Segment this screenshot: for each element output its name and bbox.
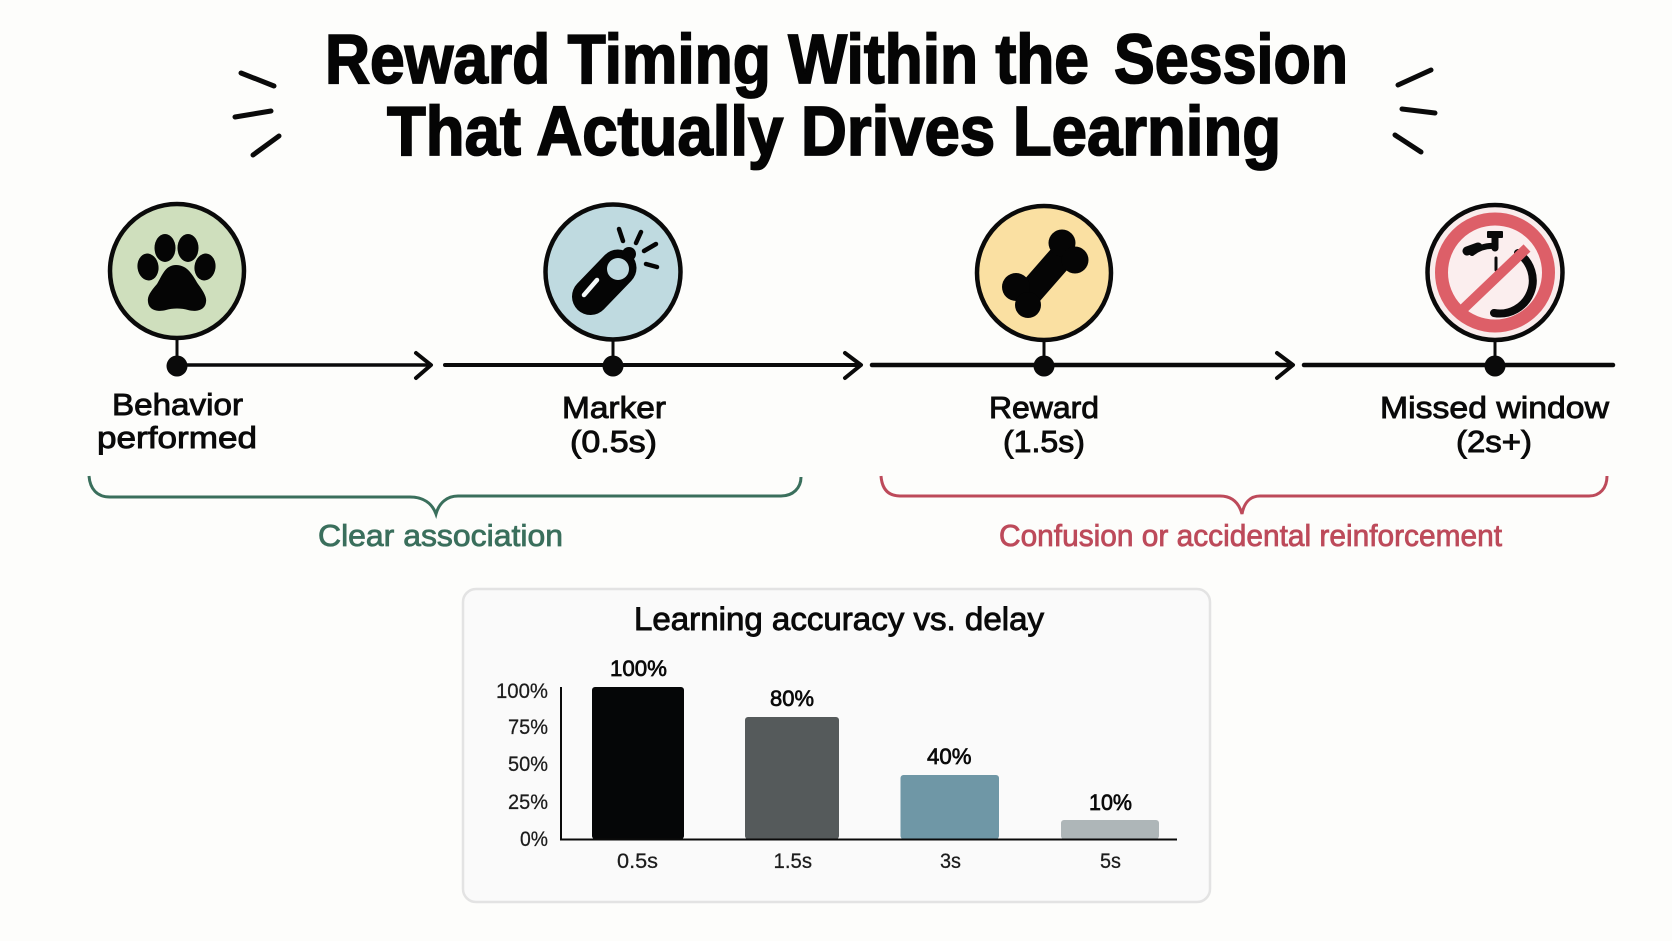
x axis labels (617, 849, 1121, 873)
icon: right accent sparks (1395, 70, 1435, 152)
y axis labels: 0% (520, 827, 548, 851)
y axis labels (496, 679, 548, 851)
label (989, 390, 1099, 459)
title: Session (1114, 20, 1348, 98)
axes (561, 687, 1177, 840)
step: reward (977, 206, 1111, 459)
label: (2s+) (1456, 424, 1532, 459)
dot and stem (1484, 341, 1506, 376)
icon: crossed-out stopwatch (1428, 205, 1562, 340)
title (325, 20, 1348, 170)
arrow: marker to reward (445, 353, 861, 378)
label: Marker (562, 390, 666, 425)
label: (0.5s) (570, 424, 657, 459)
icon: bone in yellow circle (977, 206, 1111, 340)
arrow: behavior to marker (177, 353, 431, 378)
x axis labels: 3s (940, 849, 961, 873)
title: That Actually Drives Learning (387, 92, 1281, 170)
timeline (177, 353, 1613, 378)
label (1380, 390, 1610, 459)
label (97, 387, 257, 455)
icon: paw in green circle (110, 204, 244, 338)
dot and stem (1034, 341, 1054, 376)
value labels: 40% (927, 744, 972, 769)
x axis labels: 0.5s (617, 849, 658, 873)
panel: learning accuracy chart (463, 589, 1210, 902)
icon: left accent sparks (235, 73, 279, 155)
arrow: reward to missed window (872, 353, 1293, 378)
step: behavior performed (97, 204, 257, 455)
x axis labels: 1.5s (774, 849, 812, 873)
y axis labels: 25% (508, 790, 548, 814)
step: missed window (1380, 205, 1610, 459)
bars (592, 687, 1159, 839)
label: performed (97, 420, 257, 455)
label: Behavior (112, 387, 243, 422)
x axis labels: 5s (1100, 849, 1121, 873)
bracket: confusion or accidental reinforcement: Confusion or accidental reinforcement (999, 518, 1502, 553)
bar chart (496, 656, 1177, 873)
bracket: clear association: Clear association (318, 518, 563, 553)
label: Reward (989, 390, 1099, 425)
label (562, 390, 666, 459)
value labels: 80% (770, 686, 814, 711)
line: missed window segment (1304, 363, 1613, 367)
icon: clicker in blue circle (546, 204, 680, 340)
chart title: Learning accuracy vs. delay (634, 601, 1044, 637)
bracket: confusion or accidental reinforcement (881, 476, 1607, 553)
dot and stem (166, 338, 188, 376)
value labels: 100% (610, 656, 667, 681)
bracket: clear association (89, 476, 801, 553)
step: marker (546, 204, 680, 459)
y axis labels: 50% (508, 752, 548, 776)
label: Missed window (1380, 390, 1610, 425)
dot and stem (602, 340, 624, 376)
y axis labels: 100% (496, 679, 548, 703)
value labels: 10% (1089, 790, 1132, 815)
title: Reward Timing Within the (325, 20, 1089, 98)
value labels (610, 656, 1132, 815)
y axis labels: 75% (508, 715, 548, 739)
label: (1.5s) (1003, 424, 1085, 459)
